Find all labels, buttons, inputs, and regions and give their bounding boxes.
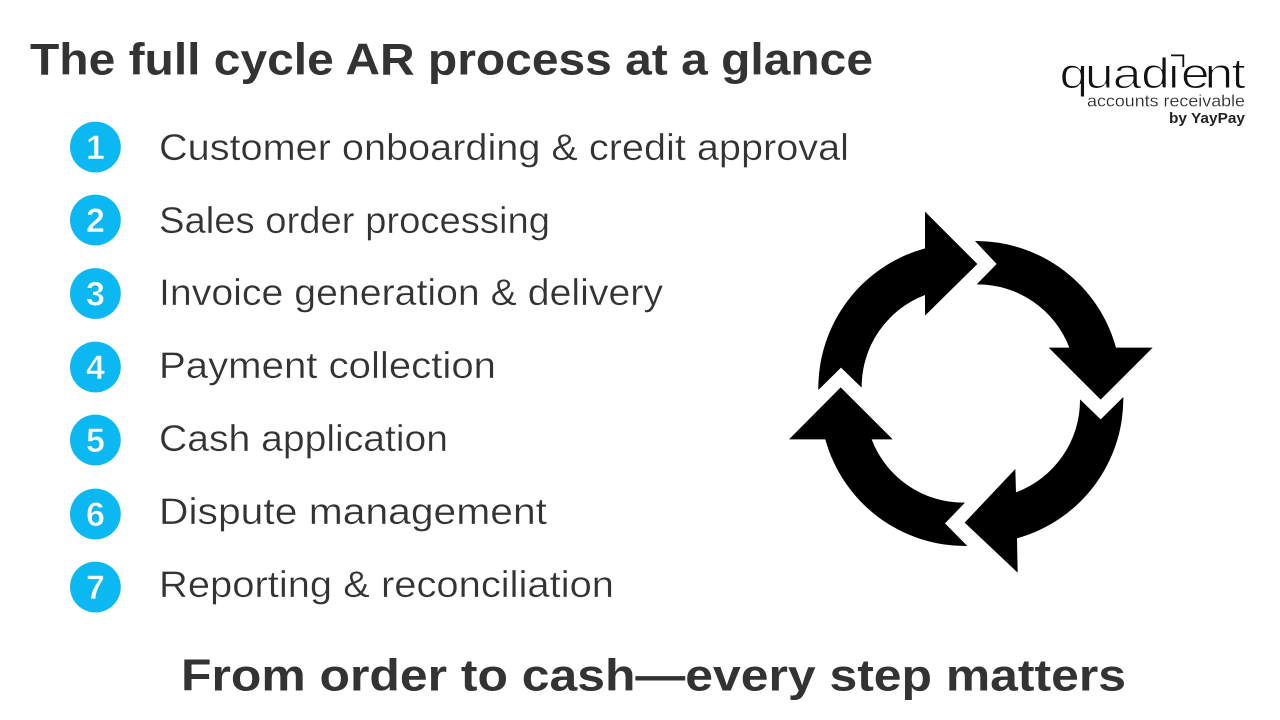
step 6: 6 [86, 496, 105, 534]
step 1: Customer onboarding & credit approval [159, 127, 849, 168]
step 6 [70, 489, 548, 539]
step 7: 7 [86, 569, 105, 607]
step 5: Cash application [159, 418, 448, 459]
step 3: 3 [86, 276, 105, 314]
closing tagline: From order to cash—every step matters [181, 652, 1126, 700]
step 5 [70, 415, 448, 465]
step 1: 1 [86, 129, 105, 167]
step 3 [70, 268, 664, 319]
logo i-dot mask and bracket [1169, 50, 1183, 67]
arrow: top left [818, 212, 977, 390]
logo tagline: accounts receivable [1087, 92, 1245, 110]
arrow: top right [975, 241, 1153, 400]
step 5: 5 [86, 422, 105, 460]
step 2: 2 [86, 202, 105, 240]
step 3: Invoice generation & delivery [159, 272, 664, 313]
logo byline: by YayPay [1169, 111, 1245, 127]
step 2: Sales order processing [159, 200, 550, 241]
step 7 [70, 562, 614, 612]
step 6: Dispute management [159, 491, 548, 532]
icon: circular arrows [789, 212, 1153, 573]
step 1 [70, 122, 849, 172]
logo wordmark: quadient [1060, 50, 1246, 98]
arrow: bottom left [789, 387, 967, 546]
logo: quadient accounts receivable by YayPay [1060, 50, 1246, 127]
step 2 [70, 195, 550, 245]
step 4: 4 [86, 349, 105, 387]
step 7: Reporting & reconciliation [159, 564, 614, 605]
title: The full cycle AR process at a glance [30, 36, 873, 84]
arrow: bottom right [965, 397, 1123, 573]
step 4: Payment collection [159, 345, 496, 386]
step 4 [70, 342, 496, 392]
